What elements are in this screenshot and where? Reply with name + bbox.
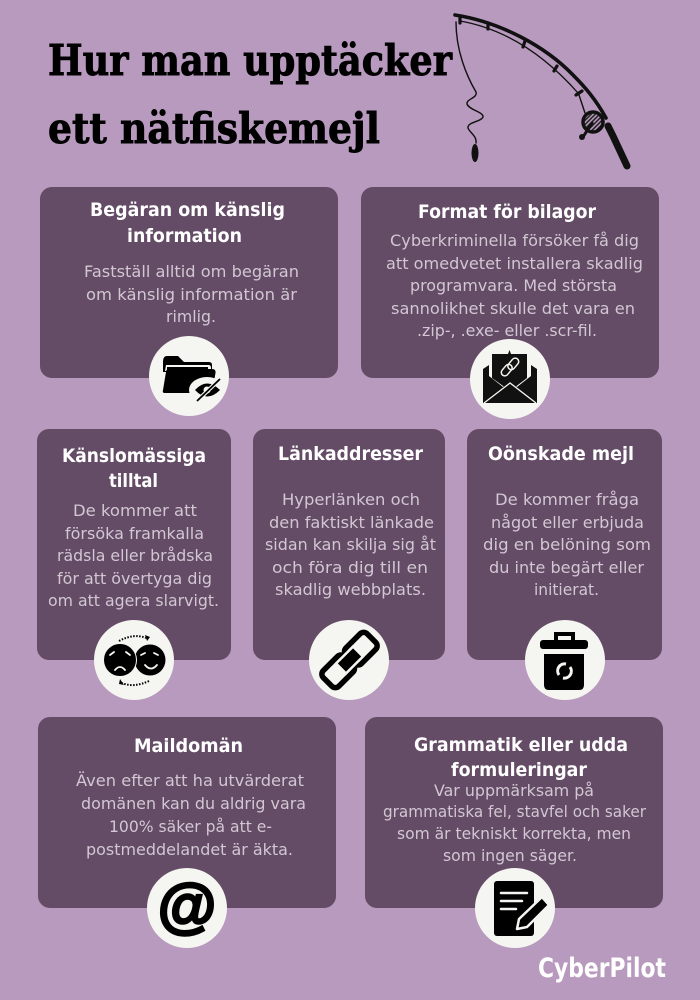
panel: Känslomässiga tilltal — [37, 429, 231, 700]
heading: Begäran om känslig — [90, 199, 285, 221]
panel: Begäran om känslig information — [40, 187, 338, 416]
icon: at sign — [147, 868, 227, 948]
title: ett nätfiskemejl — [48, 104, 380, 153]
heading: tilltal — [109, 470, 158, 492]
panel: Grammatik eller udda formuleringar — [365, 717, 663, 948]
heading: Länkaddresser — [278, 443, 424, 465]
panel: Länkaddresser — [253, 429, 445, 700]
text block — [386, 231, 643, 340]
text block: domänen kan du aldrig vara — [81, 794, 306, 813]
icon: document with pencil — [475, 868, 555, 948]
text block: Hyperlänken och — [282, 490, 420, 509]
text block — [48, 501, 219, 610]
text block: De kommer fråga — [495, 490, 639, 509]
text block — [483, 490, 651, 599]
text block: något eller erbjuda — [491, 513, 644, 532]
text block — [84, 262, 299, 326]
heading — [90, 199, 285, 247]
heading: Oönskade mejl — [488, 443, 634, 465]
text block: postmeddelandet är äkta. — [86, 840, 293, 859]
title — [48, 36, 453, 153]
icon: folder with crossed eye — [149, 336, 229, 416]
icon: at sign: @ — [158, 872, 216, 939]
text block: De kommer att — [73, 501, 197, 520]
heading: Format för bilagor — [418, 201, 597, 223]
text block: och föra dig till en — [272, 558, 428, 577]
text block: skadlig webbplats. — [275, 580, 426, 599]
text block — [265, 490, 436, 599]
text block: som ingen säger. — [443, 846, 577, 865]
text block: sannolikhet skulle det vara en — [391, 299, 635, 318]
text block: för att övertyga dig — [57, 569, 212, 588]
text block: 100% säker på att e- — [109, 817, 272, 836]
heading — [62, 445, 206, 492]
icon: chain link — [309, 620, 389, 700]
text block: .zip-, .exe- eller .scr-fil. — [417, 321, 597, 340]
text block: initierat. — [534, 580, 599, 599]
panel: Maildomän — [38, 717, 336, 948]
text block: grammatiska fel, stavfel och saker — [383, 802, 646, 821]
text block: Cyberkriminella försöker få dig — [390, 231, 639, 250]
panel: Oönskade mejl — [467, 429, 662, 700]
text block — [383, 781, 646, 865]
heading: information — [127, 225, 242, 247]
heading: formuleringar — [451, 759, 588, 781]
text block: programvara. Med största — [410, 276, 617, 295]
text block: rädsla eller brådska — [57, 546, 213, 565]
text block: Även efter att ha utvärderat — [76, 771, 304, 790]
text block: den faktiskt länkade — [269, 513, 434, 532]
text block: om känslig information är — [86, 285, 297, 304]
text block: sidan kan skilja sig åt — [265, 535, 436, 554]
text block: försöka framkalla — [65, 524, 204, 543]
panel: Format för bilagor — [361, 187, 659, 419]
icon: envelope with link — [470, 339, 550, 419]
text block: om att agera slarvigt. — [48, 591, 219, 610]
text block: Var uppmärksam på — [434, 781, 594, 800]
logo: CyberPilot: CyberPilot — [538, 953, 666, 984]
text block: du inte begärt eller — [489, 558, 644, 577]
text block: rimlig. — [166, 307, 216, 326]
icon: trash bin — [525, 620, 605, 700]
heading: Grammatik eller udda — [414, 734, 628, 756]
heading: Maildomän — [134, 735, 243, 757]
text block — [76, 771, 306, 859]
text block: Fastställ alltid om begäran — [84, 262, 299, 281]
icon: fishing rod — [455, 15, 627, 166]
heading — [414, 734, 628, 781]
icon: sad and happy faces — [94, 620, 174, 700]
text block: som är tekniskt korrekta, men — [397, 824, 631, 843]
title: Hur man upptäcker — [48, 36, 453, 85]
text block: dig en belöning som — [483, 535, 651, 554]
text block: att omedvetet installera skadlig — [386, 254, 643, 273]
heading: Känslomässiga — [62, 445, 206, 467]
